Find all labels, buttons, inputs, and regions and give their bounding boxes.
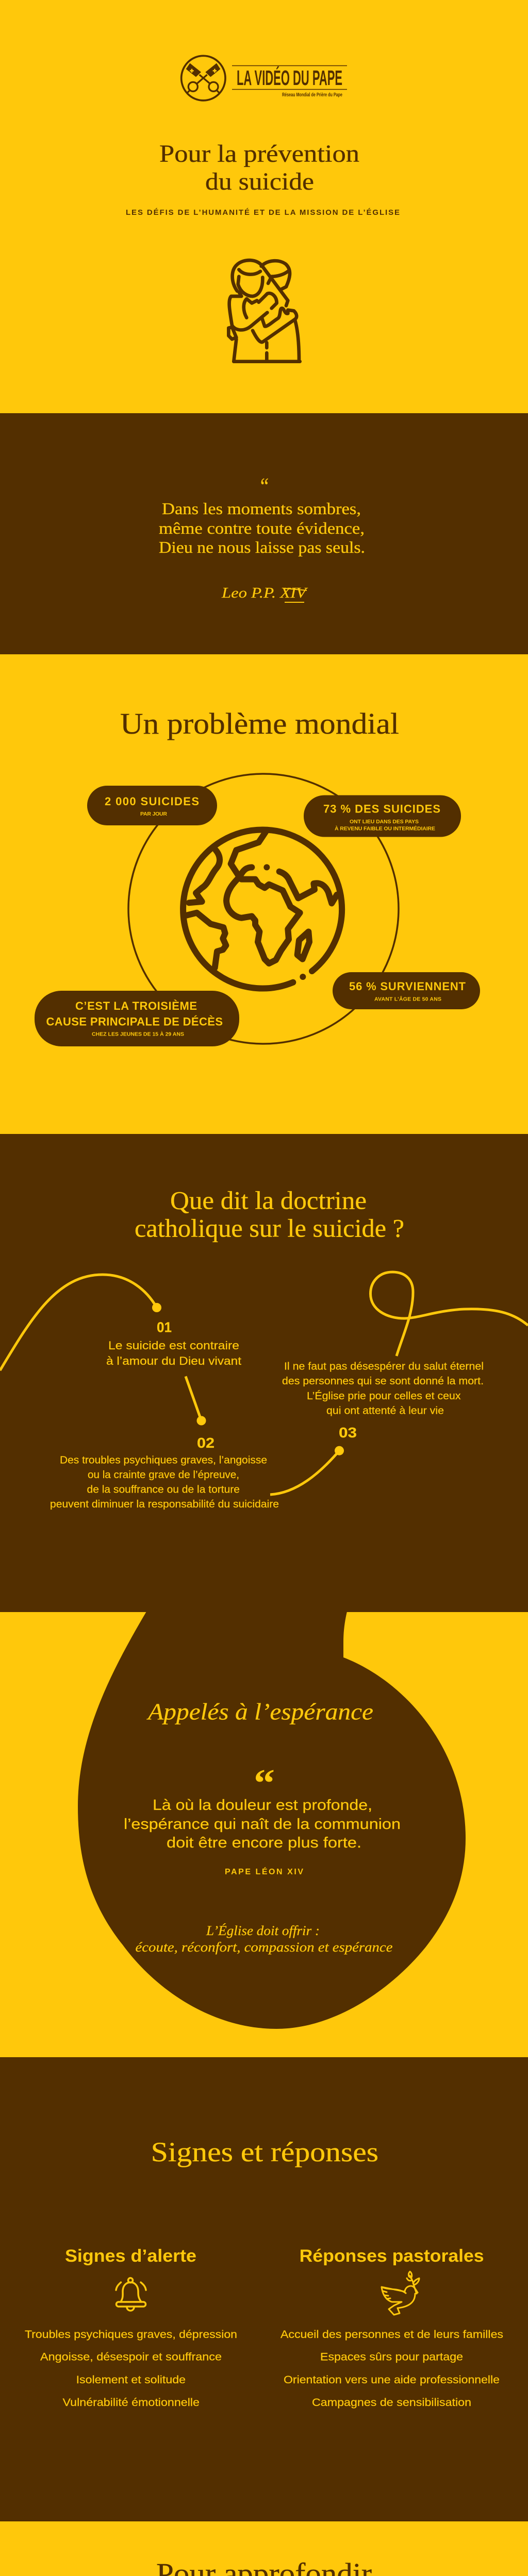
point 02: de la souffrance ou de la torture — [87, 1484, 240, 1495]
church offering: L’Église doit offrir : — [206, 1923, 320, 1938]
quote: doit être encore plus forte. — [167, 1835, 361, 1851]
stat: third cause: C’EST LA TROISIÈME — [75, 999, 197, 1012]
column: pastoral responses: Espaces sûrs pour partage — [320, 2351, 463, 2363]
point 01: à l’amour du Dieu vivant — [106, 1354, 241, 1367]
point 03: qui ont attenté à leur vie — [326, 1405, 444, 1417]
ribbon loop — [370, 1272, 528, 1356]
point 02: Des troubles psychiques graves, l’angoisse — [60, 1455, 267, 1466]
stat: 2 000 suicides: 2 000 SUICIDES — [105, 795, 199, 808]
stat: third cause: CAUSE PRINCIPALE DE DÉCÈS — [46, 1015, 223, 1028]
panel: signs and responses — [0, 2057, 528, 2521]
logo: La Vidéo du Pape: LA VIDÉO DU PAPE — [237, 66, 342, 90]
stat: third cause — [35, 991, 239, 1046]
heading — [135, 1186, 404, 1243]
point 03: 03 — [339, 1425, 357, 1440]
point 02: peuvent diminuer la responsabilité du suicidaire — [50, 1499, 279, 1510]
panel: called to hope — [0, 1612, 528, 2057]
quote text: même contre toute évidence, — [159, 519, 365, 537]
icon: embracing couple — [228, 260, 300, 362]
icon: dove — [382, 2272, 419, 2315]
church offering — [135, 1923, 393, 1955]
panel: global problem — [0, 654, 528, 1134]
stat: third cause: CHEZ LES JEUNES DE 15 À 29 ANS — [92, 1031, 184, 1038]
point 02 — [50, 1435, 279, 1510]
heading: Un problème mondial — [120, 707, 399, 740]
subtitle: LES DÉFIS DE L’HUMANITÉ ET DE LA MISSION DE L’ÉGLISE — [126, 208, 400, 217]
column: pastoral responses: Campagnes de sensibilisation — [312, 2397, 471, 2409]
point 02: ou la crainte grave de l’épreuve, — [88, 1469, 239, 1481]
quote mark: “ — [260, 473, 269, 499]
stat: 56 %: AVANT L’ÂGE DE 50 ANS — [374, 995, 441, 1003]
point 01: Le suicide est contraire — [108, 1339, 239, 1352]
column: warning signs: Vulnérabilité émotionnelle — [63, 2397, 200, 2409]
column: warning signs: Troubles psychiques graves, dépression — [25, 2329, 237, 2341]
point 01: 01 — [157, 1319, 172, 1335]
logo: La Vidéo du Pape — [182, 56, 347, 100]
column: pastoral responses: Réponses pastorales — [300, 2246, 484, 2266]
point 02: 02 — [197, 1435, 214, 1451]
icon: globe — [183, 830, 342, 989]
church offering: écoute, réconfort, compassion et espérance — [135, 1940, 393, 1955]
column: pastoral responses: Accueil des personnes et de leurs familles — [280, 2329, 503, 2341]
title: Pour la prévention — [159, 140, 359, 167]
panel: papal quote — [0, 413, 528, 654]
attribution: PAPE LÉON XIV — [225, 1867, 303, 1876]
column: pastoral responses — [280, 2246, 503, 2409]
stat: 73 % — [304, 795, 461, 837]
connector to point 02 — [186, 1377, 206, 1425]
signature: Leo P.P. XIV — [221, 585, 308, 601]
icon: bell — [116, 2278, 146, 2311]
quote text: Dieu ne nous laisse pas seuls. — [159, 538, 365, 556]
panel: header — [0, 0, 528, 413]
point 03 — [282, 1361, 484, 1440]
heading: catholique sur le suicide ? — [135, 1214, 404, 1243]
column: warning signs: Isolement et solitude — [76, 2374, 186, 2386]
speech bubble — [78, 1612, 466, 2029]
point 03: Il ne faut pas désespérer du salut éternel — [284, 1361, 484, 1372]
stat: 56 % — [333, 972, 480, 1009]
quote: l’espérance qui naît de la communion — [124, 1816, 401, 1833]
heading: Appelés à l’espérance — [146, 1699, 373, 1725]
panel: catholic doctrine — [0, 1134, 528, 1612]
column: warning signs: Angoisse, désespoir et souffrance — [40, 2351, 222, 2363]
column: pastoral responses: Orientation vers une aide professionnelle — [284, 2374, 500, 2386]
stat: 73 %: À REVENU FAIBLE OU INTERMÉDIAIRE — [335, 825, 435, 832]
icon: quote marks: “ — [254, 1761, 275, 1805]
stat: 2 000 suicides — [87, 786, 217, 825]
stat: 56 %: 56 % SURVIENNENT — [349, 980, 466, 993]
orbit ring — [128, 774, 399, 1044]
curve to point 03 — [270, 1446, 344, 1495]
quote text: Dans les moments sombres, — [162, 499, 361, 518]
quote — [124, 1797, 401, 1851]
logo: La Vidéo du Pape: Réseau Mondial de Prière du Pape — [282, 92, 342, 98]
title: du suicide — [205, 168, 314, 195]
column: warning signs: Signes d’alerte — [65, 2246, 196, 2266]
stat: 2 000 suicides: PAR JOUR — [140, 811, 167, 817]
title — [159, 140, 359, 195]
point 03: L’Église prie pour celles et ceux — [307, 1390, 461, 1402]
curve to point 01 — [0, 1275, 161, 1370]
heading: Signes et réponses — [151, 2137, 378, 2167]
point 01 — [106, 1319, 241, 1367]
panel: further reading — [0, 2521, 528, 2576]
quote text — [159, 499, 365, 556]
quote: Là où la douleur est profonde, — [153, 1797, 372, 1814]
heading: Que dit la doctrine — [170, 1186, 367, 1215]
stat: 73 %: ONT LIEU DANS DES PAYS — [350, 819, 419, 825]
stat: 73 %: 73 % DES SUICIDES — [323, 803, 440, 815]
column: warning signs — [25, 2246, 237, 2409]
point 03: des personnes qui se sont donné la mort. — [282, 1376, 484, 1387]
